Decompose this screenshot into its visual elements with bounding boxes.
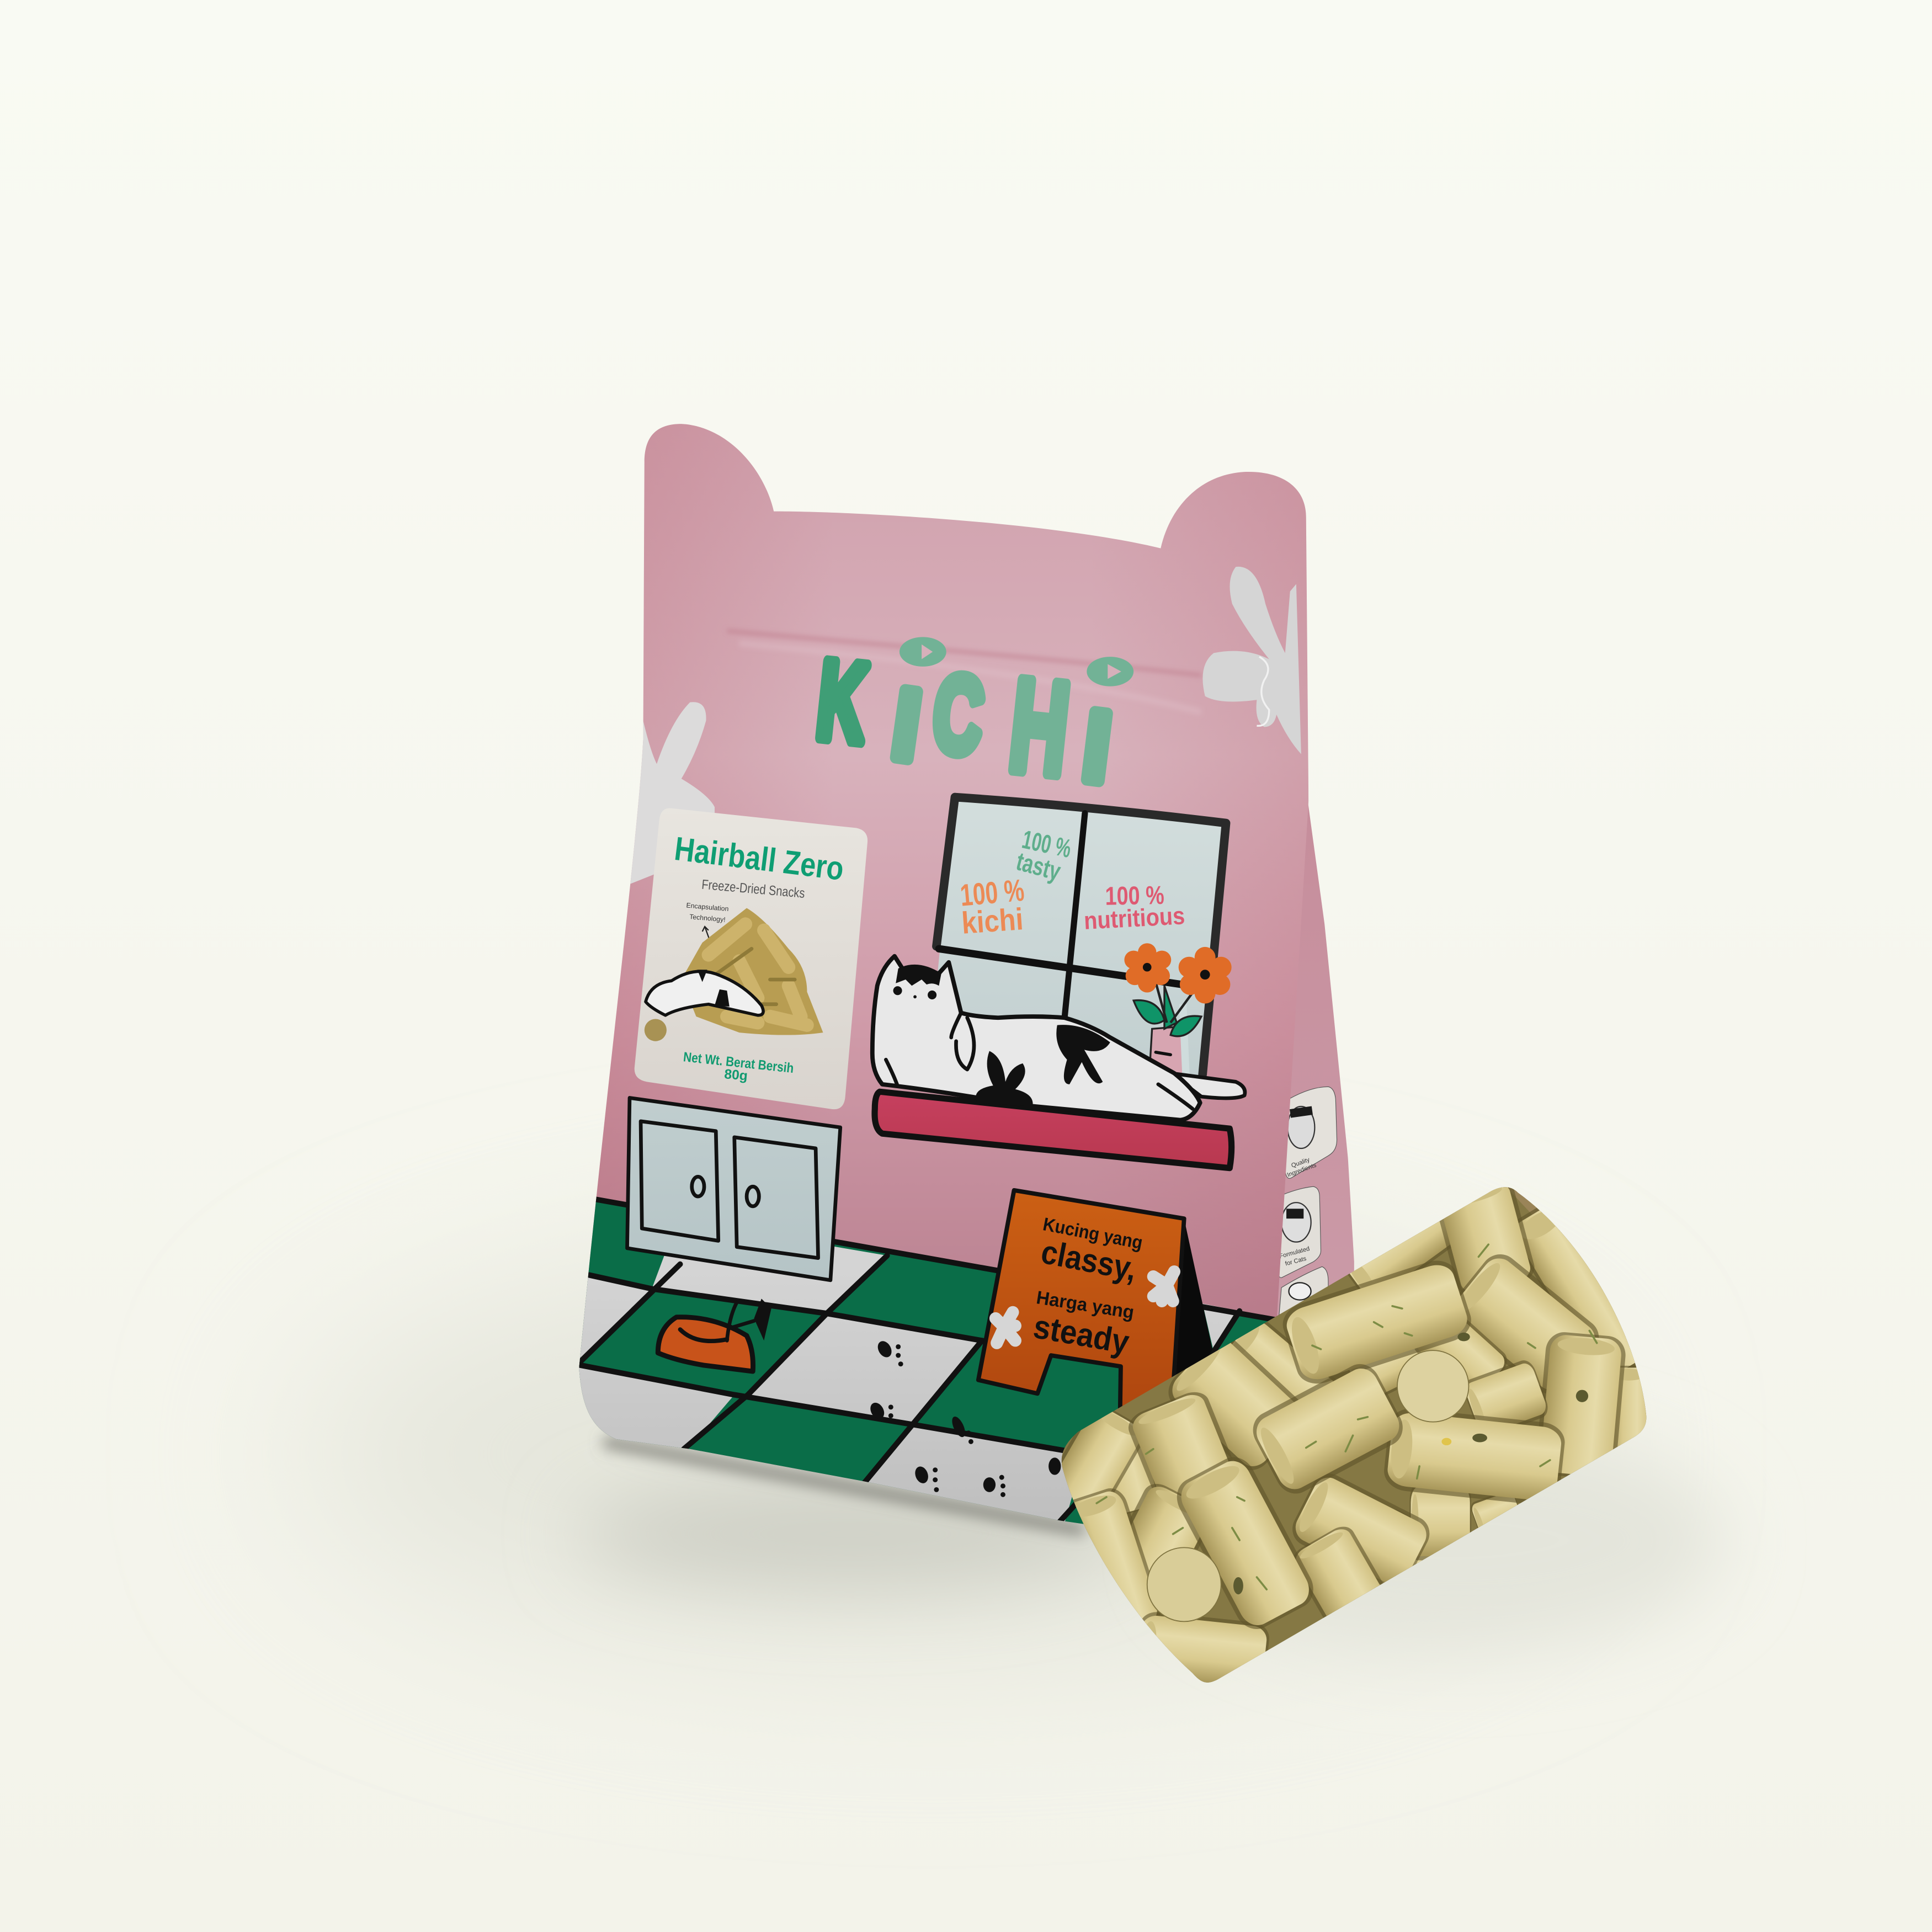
- hairball: [645, 1019, 667, 1041]
- herb speckles: [1097, 1244, 1597, 1589]
- white flower, left: [622, 702, 715, 887]
- window text: nutritious: [1083, 902, 1185, 935]
- encapsulation note: Technology!: [689, 913, 726, 924]
- sleeping cat: [872, 956, 1245, 1120]
- net weight: 80g: [723, 1067, 748, 1084]
- hang hole highlight: [1257, 657, 1269, 726]
- sign text: Kucing yang: [1041, 1214, 1145, 1253]
- floor tiles: [567, 1196, 1281, 1565]
- floor: [567, 1196, 1281, 1565]
- freeze-dried snack close-up: [1042, 1170, 1663, 1700]
- sign text: classy,: [1038, 1233, 1140, 1288]
- logo: KICHI: H: [1004, 652, 1075, 803]
- gusset badge: quality ingredients: [1285, 1087, 1337, 1179]
- gusset badge: formulated for cats: for Cats: [1285, 1255, 1307, 1268]
- logo: KICHI: I: [887, 669, 927, 781]
- sign text: Harga yang: [1035, 1287, 1136, 1323]
- cabinet doors: [641, 1121, 818, 1258]
- sign text: [1031, 1214, 1145, 1361]
- cabinet: [627, 1098, 840, 1280]
- product mockup scene: [250, 424, 1764, 1776]
- gusset badge: quality ingredients: Ingredients: [1286, 1162, 1317, 1179]
- window cushion: [875, 1092, 1232, 1168]
- food bowl with plant: [658, 1298, 771, 1371]
- net weight: Net Wt. Berat Bersih: [683, 1050, 795, 1076]
- paw prints: [867, 1339, 1061, 1497]
- mini cat on pile: [646, 970, 763, 1015]
- snack pellets: [1042, 1177, 1655, 1693]
- soft ground shadow: [296, 1244, 1725, 1663]
- pouch front panel: [567, 419, 1318, 1565]
- orange flowers: [1124, 943, 1232, 1004]
- floor grid lines: [574, 1196, 1281, 1521]
- gusset badge: chef cat: [1278, 1266, 1328, 1330]
- round pellet ends: [1147, 1350, 1468, 1621]
- window text: 100 %: [959, 872, 1025, 913]
- logo: KICHI: I: [1078, 690, 1116, 803]
- sign flower marks: [996, 1271, 1174, 1343]
- logo: KICHI: K: [812, 638, 872, 766]
- white flower, top right: [1202, 567, 1301, 754]
- window text: tasty: [1013, 847, 1063, 886]
- zipper crease: [727, 631, 1201, 712]
- label title: Hairball Zero: [673, 829, 846, 887]
- logo: KICHI: [812, 637, 1133, 803]
- gusset badge: formulated for cats: Formulated: [1279, 1246, 1311, 1260]
- product label: [635, 808, 867, 1109]
- window frame: [936, 797, 1226, 1074]
- flower vase: [1124, 943, 1232, 1090]
- gusset badge: formulated for cats: [1278, 1186, 1321, 1278]
- encapsulation note: Encapsulation: [686, 901, 729, 913]
- sign text: steady: [1031, 1307, 1132, 1361]
- sandwich board sign: [978, 1190, 1212, 1429]
- window text: [959, 825, 1185, 940]
- window text: kichi: [960, 901, 1024, 940]
- window text: 100 %: [1020, 825, 1074, 863]
- gusset badge: quality ingredients: Quality: [1290, 1156, 1311, 1169]
- logo: KICHI: C: [928, 652, 989, 778]
- logo eyes: [900, 637, 1133, 686]
- window: [930, 797, 1226, 1078]
- pouch side gusset: [1276, 789, 1354, 1355]
- cat markings: [893, 965, 1110, 1106]
- encapsulation note: [686, 901, 729, 944]
- label subtitle: Freeze-Dried Snacks: [701, 877, 805, 901]
- snack pile illustration: [682, 908, 823, 1035]
- window text: 100 %: [1105, 881, 1164, 911]
